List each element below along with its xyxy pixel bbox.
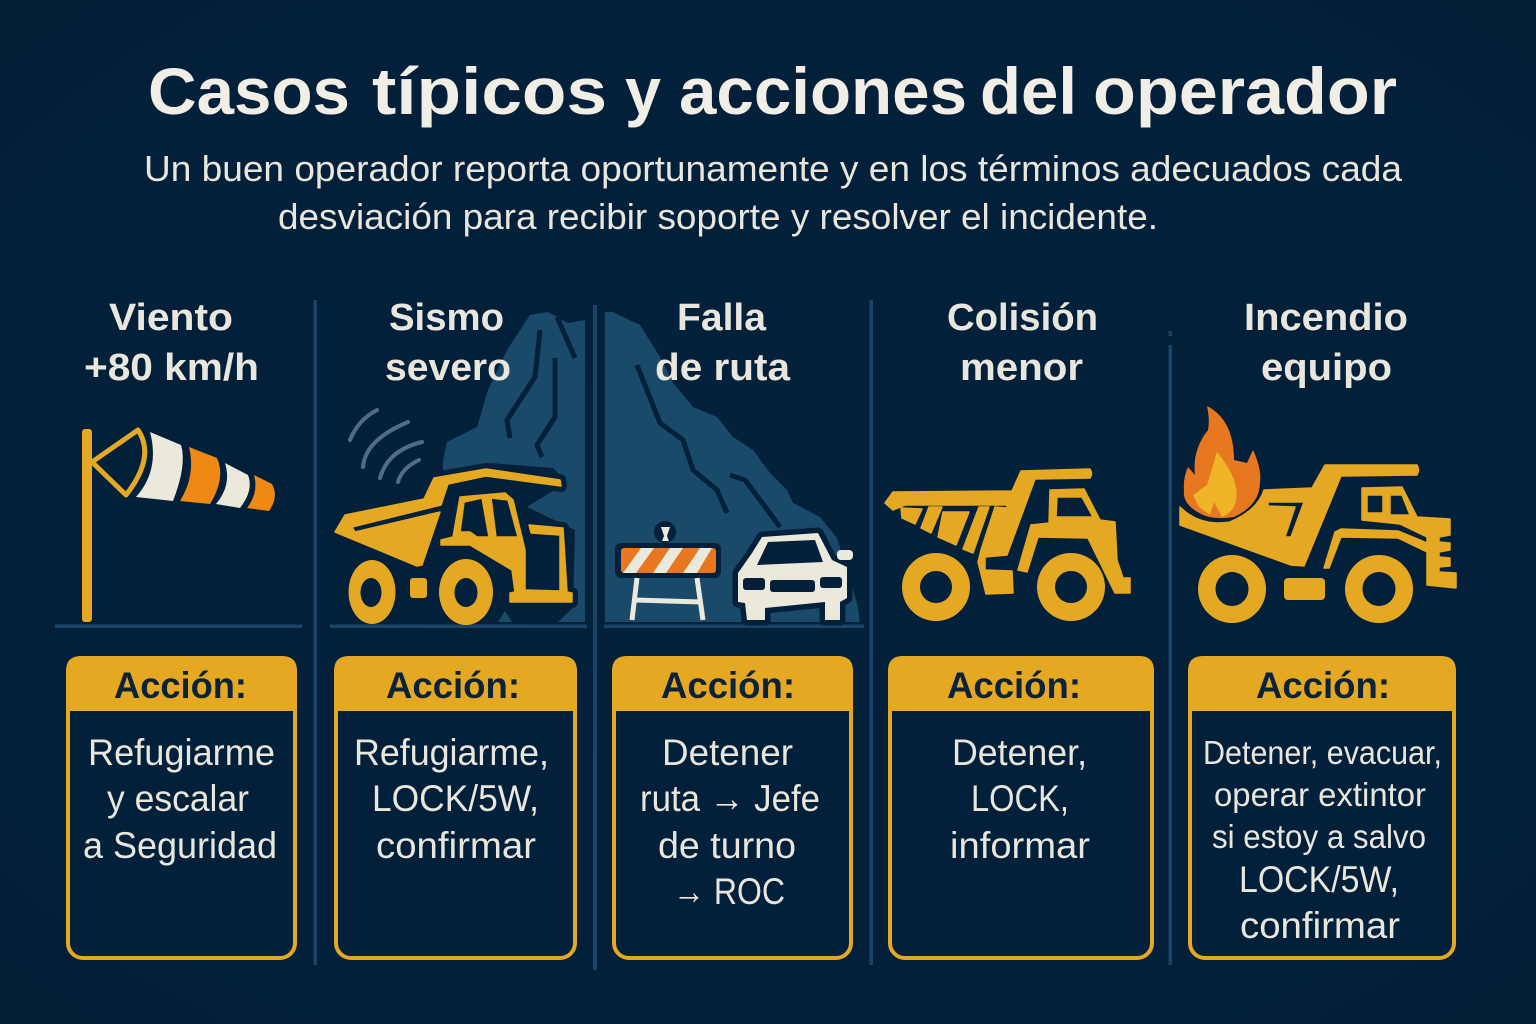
heading: Falla: Falla xyxy=(677,297,767,339)
panel: action Sismo: LOCK/5W, xyxy=(372,778,539,819)
icon: seismic waves xyxy=(350,410,422,482)
heading: Incendio xyxy=(1244,297,1408,389)
heading: Sismo: Sismo xyxy=(389,297,504,339)
subtitle: desviación para recibir soporte y resolver el incidente. xyxy=(278,196,1158,237)
panel: action Falla xyxy=(612,656,853,958)
heading: Viento xyxy=(84,297,259,389)
subtitle xyxy=(144,148,1403,237)
panel: action Viento: Acción: xyxy=(114,665,247,706)
panel: action Falla: → ROC xyxy=(673,871,785,912)
panel: action Viento: y escalar xyxy=(107,778,249,819)
panel: action Incendio: Acción: xyxy=(1256,665,1390,706)
icon: haul truck, collision xyxy=(885,469,1130,621)
panel: action Incendio: operar extintor xyxy=(1214,776,1426,813)
panel: action Viento xyxy=(66,656,297,958)
panel: action Colisión: LOCK, xyxy=(971,778,1069,819)
title: Casos xyxy=(148,54,350,128)
panel: action Incendio: si estoy a salvo xyxy=(1212,818,1426,855)
icon: pickup vehicle xyxy=(738,533,853,620)
heading: Colisión xyxy=(947,297,1098,389)
panel: action Incendio xyxy=(1188,656,1456,958)
heading: Sismo xyxy=(385,297,511,389)
icon: haul truck on fire xyxy=(1180,406,1456,623)
subtitle: Un buen operador reporta oportunamente y en los términos adecuados cada xyxy=(144,148,1403,189)
panel: action Viento: a Seguridad xyxy=(83,825,277,866)
panel: action Sismo: Acción: xyxy=(386,665,520,706)
icon: road barrier xyxy=(615,521,721,620)
panel: action Colisión: Acción: xyxy=(947,665,1081,706)
title: acciones xyxy=(679,54,967,128)
mountain: behind Falla de ruta xyxy=(605,312,860,622)
heading: Colisión: menor xyxy=(960,347,1083,389)
title: del xyxy=(980,54,1077,128)
title: operador xyxy=(1093,54,1397,128)
panel: action Colisión: Detener, xyxy=(952,732,1087,773)
heading: Colisión: Colisión xyxy=(947,297,1098,339)
heading: Sismo: severo xyxy=(385,347,511,389)
title xyxy=(148,54,1397,128)
panel: action Falla: de turno xyxy=(658,825,796,866)
panel: action Sismo: confirmar xyxy=(376,825,536,866)
heading: Incendio: equipo xyxy=(1261,347,1392,389)
panel: action Incendio: LOCK/5W, xyxy=(1239,859,1399,900)
heading: Falla xyxy=(655,297,791,389)
panel: action Incendio: Detener, evacuar, xyxy=(1203,734,1442,771)
panel: action Falla: Acción: xyxy=(661,665,795,706)
mountain: behind Sismo truck xyxy=(443,312,585,622)
heading: Viento: +80 km/h xyxy=(84,347,259,389)
heading: Viento: Viento xyxy=(109,297,233,339)
panel: action Falla: Detener xyxy=(662,732,793,773)
icon: haul truck, earthquake xyxy=(335,469,572,625)
panel: action Incendio: confirmar xyxy=(1240,905,1400,946)
title: típicos xyxy=(372,54,607,128)
heading: Incendio: Incendio xyxy=(1244,297,1408,339)
title: y xyxy=(625,54,661,128)
panel: action Viento: Refugiarme xyxy=(88,732,275,773)
panel: action Colisión: informar xyxy=(950,825,1090,866)
heading: Falla: de ruta xyxy=(655,347,791,389)
panel: action Colisión xyxy=(888,656,1154,958)
icon: windsock xyxy=(82,429,275,622)
panel: action Sismo xyxy=(334,656,577,958)
panel: action Sismo: Refugiarme, xyxy=(354,732,549,773)
panel: action Falla: ruta → Jefe xyxy=(640,778,820,819)
